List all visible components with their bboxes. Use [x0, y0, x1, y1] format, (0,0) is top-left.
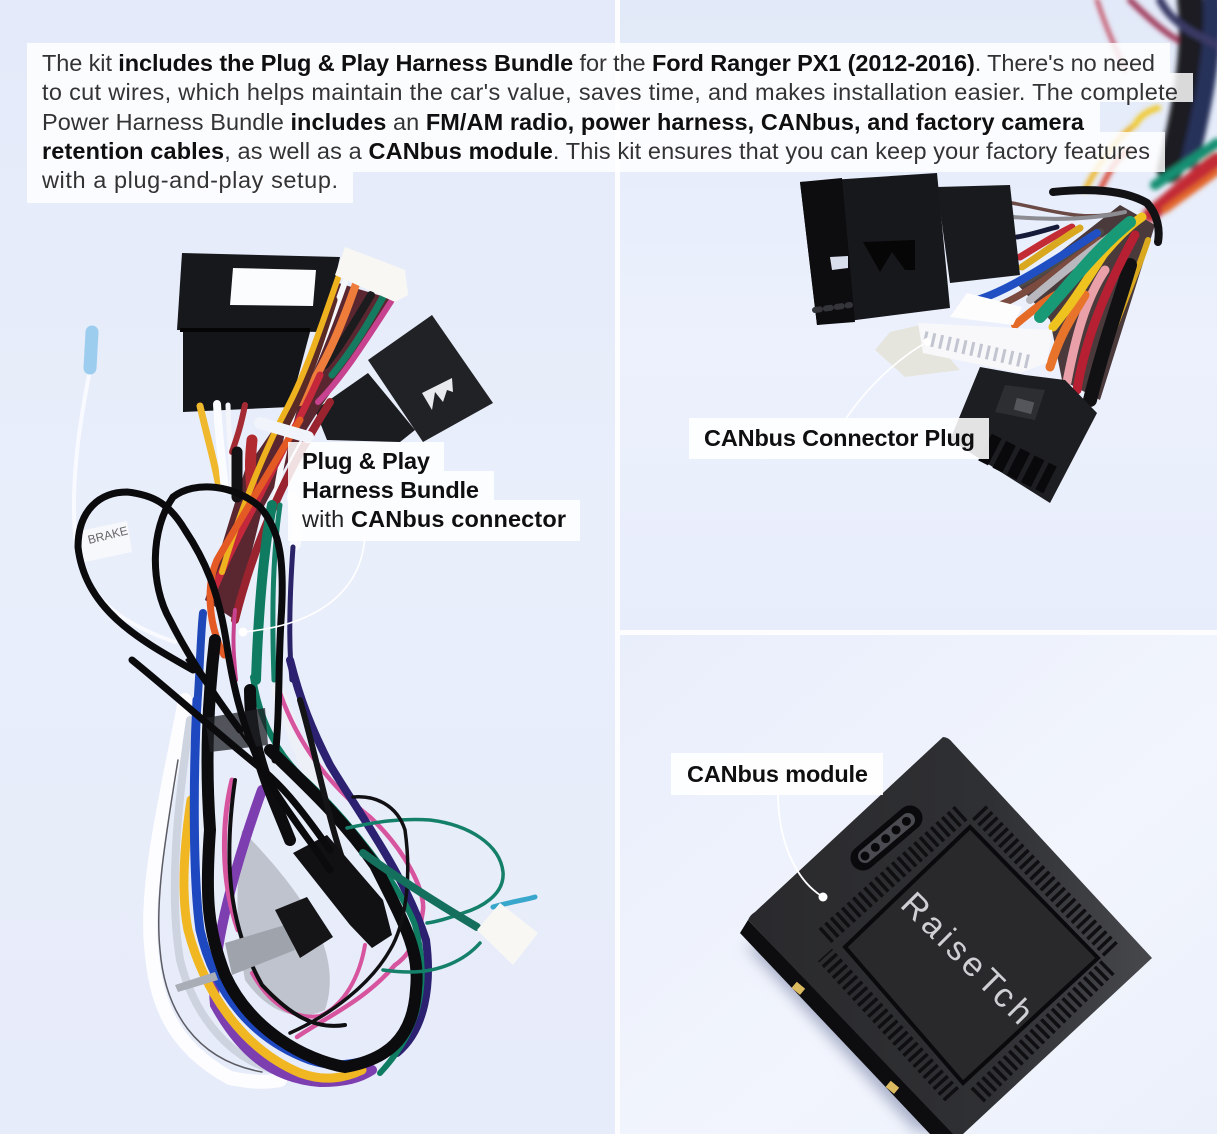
module top face: [748, 737, 1152, 1134]
white header connector: [875, 293, 1052, 377]
small white connector on green wire: [477, 903, 538, 965]
square black connector: [315, 315, 493, 442]
upper wires: [196, 278, 395, 720]
callout: CANbus module: CANbus module: [687, 761, 868, 787]
blurred wires at top right corner: [1085, 0, 1217, 215]
callout: CANbus connector plug: CANbus Connector Plug: [704, 425, 975, 451]
callout: harness bundle: Harness Bundle: [302, 477, 479, 503]
callout: CANbus connector plug: [689, 338, 989, 459]
callout: harness bundle: with CANbus connector: [301, 506, 566, 532]
callout: harness bundle: Plug & Play: [302, 448, 430, 474]
lower wires: [150, 640, 535, 1082]
callout: harness bundle: [238, 442, 580, 636]
white cable tie: [260, 423, 308, 437]
callout: CANbus module: [671, 753, 883, 902]
black looped cable: [78, 487, 330, 870]
intro line 1: The kit includes the Plug & Play Harness Bundle for the Ford Ranger PX1 (2012-2016). There's no need: [42, 50, 1155, 76]
large black connector: [800, 173, 1020, 325]
illustration: connector plug cluster: [800, 0, 1217, 503]
intro text block: [27, 43, 1193, 203]
antenna and plug housings: [175, 708, 392, 992]
brand text: RaiseTch: [893, 885, 1040, 1032]
intro line 4: retention cables, as well as a CANbus module. This kit ensures that you can keep your factory features: [42, 138, 1150, 164]
intro highlight background: [27, 43, 1193, 203]
divider: vertical: [615, 0, 620, 1134]
black cable tie: [1053, 190, 1159, 242]
plug wires: [977, 203, 1155, 400]
chip recess: [845, 827, 1098, 1083]
divider: horizontal: [620, 630, 1217, 635]
intro line 2: to cut wires, which helps maintain the car's value, saves time, and makes installation easier. The complete: [42, 79, 1178, 105]
intro line 3: Power Harness Bundle includes an FM/AM radio, power harness, CANbus, and factory camera: [42, 109, 1085, 135]
panel: connector plug photo background: [620, 0, 1217, 630]
intro line 5: with a plug-and-play setup.: [41, 167, 338, 193]
illustration: CANbus module: [740, 737, 1152, 1134]
vent slot: [863, 818, 910, 858]
sensor wire with blue tip and brake tag: [74, 332, 175, 642]
main black connector: [177, 253, 340, 412]
chip teeth: [825, 812, 1111, 1097]
module side wall: [740, 920, 955, 1134]
panel: harness photo background: [0, 0, 615, 1134]
panel: CANbus module photo background: [620, 635, 1217, 1134]
white wire header connector: [335, 247, 408, 302]
illustration: plug and play harness bundle: [74, 247, 538, 1082]
sensor wire with blue tip and brake tag: BRAKE: [86, 523, 129, 547]
gold contacts: [792, 982, 899, 1094]
black square plug: [950, 367, 1097, 503]
